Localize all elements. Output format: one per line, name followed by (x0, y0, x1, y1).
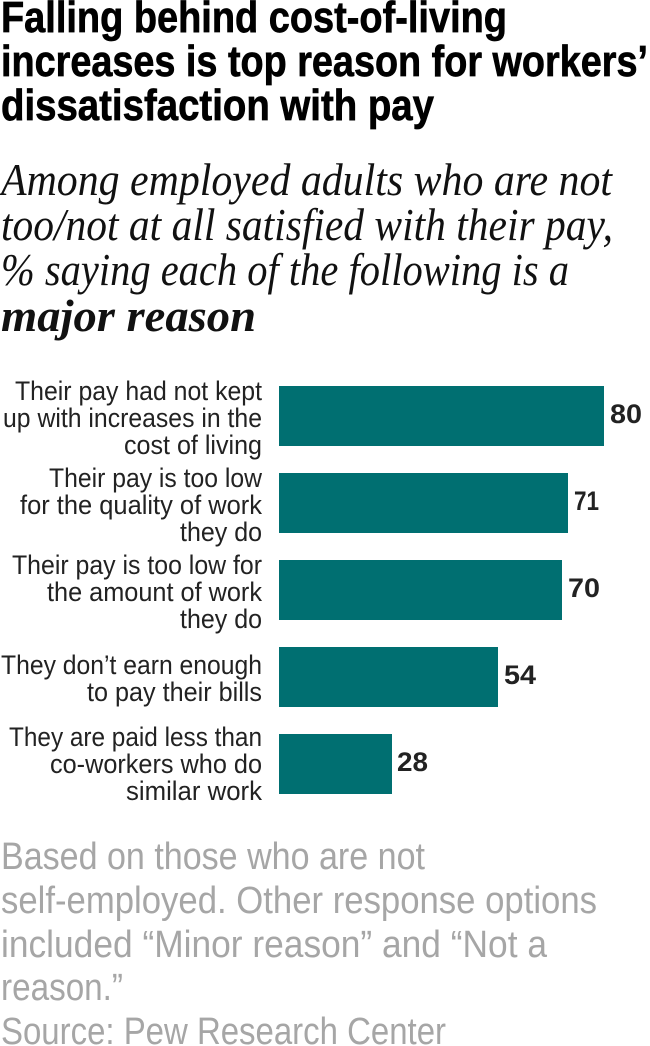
row 1: cost of living: Their pay had not kept (15, 376, 263, 406)
row 2: quality of work: Their pay is too low (49, 463, 263, 493)
footnote and source: self-employed. Other response options (1, 880, 597, 922)
row 4: pay their bills: to pay their bills (87, 677, 262, 707)
row 5: paid less than co-workers: They are paid less than (9, 722, 262, 752)
row 2: quality of work (20, 463, 599, 547)
row 3: amount of work: Their pay is too low for (12, 550, 262, 580)
row 3: amount of work: 70 (568, 573, 600, 603)
row 5: paid less than co-workers: co-workers who do (50, 749, 262, 779)
row 2: quality of work: for the quality of work (20, 490, 263, 520)
row 5: paid less than co-workers (9, 722, 428, 806)
footnote and source (1, 836, 597, 1046)
subtitle: major reason (1, 290, 256, 341)
row 2: quality of work: they do (180, 517, 262, 547)
row 3: amount of work: they do (180, 604, 262, 634)
title (1, 0, 648, 130)
row 4: pay their bills (1, 647, 536, 707)
row 4: pay their bills: 54 (504, 660, 536, 690)
footnote and source: Based on those who are not (1, 836, 425, 878)
row 4: pay their bills: They don’t earn enough (1, 650, 262, 680)
footnote and source: included “Minor reason” and “Not a (1, 924, 548, 966)
row 1: cost of living: cost of living (124, 430, 262, 460)
footnote and source: reason.” (1, 967, 123, 1009)
subtitle: % saying each of the following is a (1, 244, 569, 295)
row 1: cost of living: up with increases in the (3, 403, 262, 433)
row 5: paid less than co-workers: 28 (397, 747, 428, 777)
row 5: paid less than co-workers: similar work (126, 776, 263, 806)
title: dissatisfaction with pay (1, 81, 434, 130)
row 1: cost of living: 80 (610, 399, 642, 429)
row 3: amount of work: the amount of work (47, 577, 263, 607)
row 2: quality of work: 71 (574, 486, 599, 516)
subtitle (0, 154, 613, 341)
row 3: amount of work (12, 550, 600, 634)
bar chart (1, 376, 642, 806)
row 1: cost of living (3, 376, 642, 460)
